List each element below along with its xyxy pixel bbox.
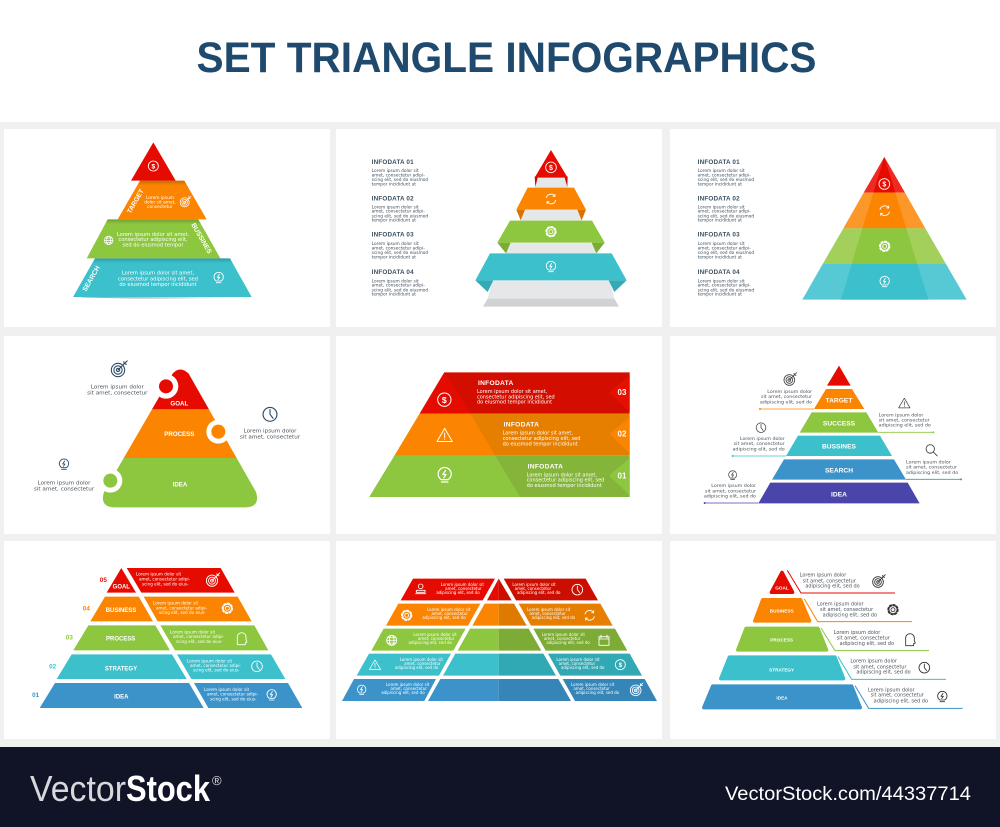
level: process xyxy=(124,409,237,458)
list: infodata: tempor incididunt ut xyxy=(698,292,742,298)
list: infodata: INFODATA 03 xyxy=(698,232,740,239)
banner: 03: consectetur adipiscing elit, sed xyxy=(477,394,555,400)
list: infodata: scing elit, sed do eiusmod xyxy=(698,213,754,219)
list: infodata: Lorem ipsum dolor sit xyxy=(698,168,745,174)
row: blue: Lorem ipsum dolor sit xyxy=(386,682,430,687)
row: 03 process: 03 xyxy=(66,634,73,641)
row: orange: adipiscing elit, sed do xyxy=(422,615,466,620)
list: infodata: scing elit, sed do eiusmod xyxy=(372,287,428,293)
row: idea xyxy=(704,686,963,708)
banner: 03: Lorem ipsum dolor sit amet, xyxy=(477,389,548,395)
row: red: Lorem ipsum dolor sit xyxy=(512,582,556,587)
icon: target xyxy=(111,361,127,377)
panel: three column pyramid xyxy=(336,541,662,739)
tier: bussines: BUSSINES xyxy=(189,222,213,256)
ring: orange xyxy=(206,420,230,444)
tier: target: sit amet, consectetur xyxy=(761,394,812,400)
ribbon: orange xyxy=(516,188,586,220)
list: infodata: scing elit, sed do eiusmod xyxy=(698,177,754,183)
row: 05 goal: Lorem ipsum dolor sit xyxy=(136,572,182,577)
layer: teal xyxy=(802,264,967,300)
row: idea: IDEA xyxy=(776,695,788,700)
list: infodata: amet, consectetur adipi- xyxy=(372,245,425,251)
row: business xyxy=(755,599,912,622)
list: infodata: Lorem ipsum dolor sit xyxy=(698,278,745,284)
row: business: sit amet, consectetur xyxy=(820,607,874,613)
list: infodata: tempor incididunt ut xyxy=(698,218,742,224)
level: idea xyxy=(102,458,258,508)
ring: red xyxy=(154,374,178,399)
row: strategy xyxy=(721,657,946,679)
row: 05 goal: amet, consectetur adipi- xyxy=(139,576,191,581)
text: goal: Lorem ipsum dolor xyxy=(91,385,144,391)
tier: target: Lorem ipsum dolor xyxy=(767,389,812,395)
row: idea: Lorem ipsum dolor xyxy=(868,687,916,693)
tier: bussines: consectetur adipiscing elit, xyxy=(118,237,188,243)
row: process: sit amet, consectetur xyxy=(837,635,891,641)
list: infodata: tempor incididunt ut xyxy=(372,218,416,224)
tier: bussines: sit amet, consectetur xyxy=(734,441,785,447)
icon: clock xyxy=(263,407,277,421)
tier: search: SEARCH xyxy=(82,265,102,293)
row: orange: adipiscing elit, sed do xyxy=(532,615,576,620)
layer: red xyxy=(864,157,905,193)
tier: search xyxy=(772,445,962,480)
row: green xyxy=(371,629,627,651)
banner: 01: Lorem ipsum dolor sit amet, xyxy=(527,472,597,478)
row: 04 business: scing elit, sed do eius- xyxy=(159,610,206,615)
tier: search: Lorem ipsum dolor xyxy=(906,460,951,466)
list: infodata: INFODATA 04 xyxy=(372,269,414,276)
row: 02 strategy xyxy=(49,654,285,679)
tier: target: TARGET xyxy=(126,188,146,215)
tier: idea: adipiscing elit, sed do xyxy=(704,494,756,500)
tier: idea: IDEA xyxy=(831,491,847,498)
banner: 02 xyxy=(395,414,630,455)
row: teal: Lorem ipsum dolor sit xyxy=(556,657,600,662)
row: red: amet, consectetur xyxy=(515,586,552,591)
tier: search: adipiscing elit, sed do xyxy=(906,470,958,476)
list: infodata: Lorem ipsum dolor sit xyxy=(372,204,419,210)
banner: 03 xyxy=(420,372,630,414)
tier: idea xyxy=(704,471,920,504)
row: blue: Lorem ipsum dolor sit xyxy=(571,682,615,687)
row: 02 strategy: STRATEGY xyxy=(105,666,137,672)
row: teal: Lorem ipsum dolor sit xyxy=(400,657,443,662)
list: infodata: Lorem ipsum dolor sit xyxy=(372,241,419,247)
tier: idea: sit amet, consectetur xyxy=(705,488,756,494)
row: orange: amet, consectetur xyxy=(529,611,566,616)
row: strategy: sit amet, consectetur xyxy=(853,664,907,670)
row: green: Lorem ipsum dolor sit xyxy=(413,632,457,637)
row: 04 business xyxy=(83,597,252,621)
list: infodata: Lorem ipsum dolor sit xyxy=(372,278,419,284)
list: infodata: INFODATA 01 xyxy=(698,159,740,166)
row: orange: amet, consectetur xyxy=(432,611,468,616)
row: strategy: STRATEGY xyxy=(769,667,795,672)
banner: 02: do eiusmod tempor incididunt xyxy=(503,441,578,447)
list: infodata: tempor incididunt ut xyxy=(372,254,416,260)
panel: six level pyramid with leader lines xyxy=(670,336,996,534)
tier: top: $ xyxy=(151,163,155,170)
list: infodata: tempor incididunt ut xyxy=(372,292,416,298)
row: red xyxy=(401,579,598,600)
list: infodata: INFODATA 03 xyxy=(372,232,414,239)
banner: 02: INFODATA xyxy=(504,422,539,429)
list: infodata: amet, consectetur adipi- xyxy=(698,209,751,215)
row: 02 strategy: amet, consectetur adipi- xyxy=(190,663,242,668)
tier: target: Lorem ipsum xyxy=(146,195,174,201)
text: process: sit amet, consectetur xyxy=(240,434,301,440)
list: infodata: amet, consectetur adipi- xyxy=(372,283,425,289)
list: infodata: amet, consectetur adipi- xyxy=(372,209,425,215)
list: infodata: scing elit, sed do eiusmod xyxy=(372,250,428,256)
list: infodata: amet, consectetur adipi- xyxy=(698,245,751,251)
footer logo: ® xyxy=(212,773,222,788)
row: blue: amet, consectetur xyxy=(573,686,610,691)
list: infodata: Lorem ipsum dolor sit xyxy=(698,241,745,247)
panel: rounded pyramid with offset lines xyxy=(670,541,996,739)
tier: bussines: sed do eiusmod tempor xyxy=(123,242,184,248)
row: goal: Lorem ipsum dolor xyxy=(800,573,847,579)
list: infodata: amet, consectetur adipi- xyxy=(698,283,751,289)
tier: bussines: adipiscing elit, sed do xyxy=(733,446,785,452)
ribbon: red xyxy=(535,150,568,187)
list: infodata: INFODATA 04 xyxy=(698,269,740,276)
row: blue xyxy=(342,679,657,701)
row: 04 business: BUSINESS xyxy=(106,608,136,614)
row: business: adipiscing elit, sed do xyxy=(823,612,877,618)
row: strategy: adipiscing elit, sed do xyxy=(856,670,911,676)
tier: search xyxy=(73,258,252,297)
list: infodata: tempor incididunt ut xyxy=(372,181,416,187)
list: infodata: scing elit, sed do eiusmod xyxy=(698,287,754,293)
icon: bulb xyxy=(59,459,69,469)
pyramid steps grey xyxy=(483,178,619,307)
row: red: amet, consectetur xyxy=(445,586,482,591)
row: 05 goal: GOAL xyxy=(113,585,130,591)
row: teal: adipiscing elit, sed do xyxy=(395,665,439,670)
row: 01 idea: IDEA xyxy=(114,694,129,700)
list: infodata: INFODATA 02 xyxy=(698,195,740,202)
tier: top xyxy=(131,142,176,181)
row: green: adipiscing elit, sed do xyxy=(546,640,590,645)
row: 05 goal: scing elit, sed do eius- xyxy=(142,581,189,586)
row: 03 process: amet, consectetur adipi- xyxy=(173,634,225,639)
tier: success: adipiscing elit, sed do xyxy=(879,423,931,429)
tier: idea: Lorem ipsum dolor xyxy=(711,483,756,489)
row: 02 strategy: 02 xyxy=(49,663,57,670)
tier: target xyxy=(118,181,207,219)
row: red: adipiscing elit, sed do xyxy=(517,590,561,595)
list: infodata xyxy=(372,159,428,298)
text: idea: Lorem ipsum dolor xyxy=(38,480,91,486)
text: process: Lorem ipsum dolor xyxy=(244,428,297,434)
ring: green xyxy=(98,469,122,493)
row: teal: $ xyxy=(619,662,623,669)
panel: split pyramid with numbers xyxy=(4,541,330,739)
page background xyxy=(0,122,1000,747)
list: infodata: Lorem ipsum dolor sit xyxy=(698,204,745,210)
tier: red xyxy=(827,366,851,386)
row: 05 goal: 05 xyxy=(100,577,107,584)
row: 03 process: PROCESS xyxy=(106,637,135,643)
banner: 02: consectetur adipiscing elit, sed xyxy=(503,436,580,442)
tier: success: sit amet, consectetur xyxy=(879,418,930,424)
row: goal: adipiscing elit, sed do xyxy=(805,584,860,590)
list: infodata xyxy=(698,159,754,298)
panel: banner pyramid xyxy=(336,336,662,534)
row: process: Lorem ipsum dolor xyxy=(834,630,881,636)
tier: success xyxy=(800,398,934,433)
layer: orange xyxy=(843,193,925,228)
tier: target: adipiscing elit, sed do xyxy=(760,399,812,405)
row: orange: Lorem ipsum dolor sit xyxy=(527,607,571,612)
row: business: Lorem ipsum dolor xyxy=(817,601,865,607)
row: red: Lorem ipsum dolor sit xyxy=(441,582,484,587)
list: infodata: INFODATA 02 xyxy=(372,195,414,202)
banner: 01 xyxy=(369,455,630,497)
tier: bussines: Lorem ipsum dolor sit amet, xyxy=(117,232,189,238)
row: process: adipiscing elit, sed do xyxy=(840,641,894,647)
row: 02 strategy: Lorem ipsum dolor sit xyxy=(187,658,233,663)
banner: 03: INFODATA xyxy=(478,380,514,387)
tier: search: sit amet, consectetur xyxy=(906,465,957,471)
ground shadow xyxy=(82,297,247,299)
list: infodata: scing elit, sed do eiusmod xyxy=(372,213,428,219)
row: goal: sit amet, consectetur xyxy=(803,578,857,584)
level: idea: IDEA xyxy=(173,481,188,488)
banner: 01: 01 xyxy=(618,471,627,480)
list: infodata: tempor incididunt ut xyxy=(698,254,742,260)
banner: 01: INFODATA xyxy=(528,463,563,470)
row: goal: GOAL xyxy=(775,586,789,591)
tier: bussines xyxy=(87,219,220,258)
tier: search: SEARCH xyxy=(825,467,853,474)
tier: search: do eiusmod tempor incididunt xyxy=(119,282,197,288)
row: green: adipiscing elit, sed do xyxy=(409,640,453,645)
footer logo: Stock xyxy=(126,768,211,809)
list: infodata: amet, consectetur adipi- xyxy=(698,173,751,179)
list: infodata: INFODATA 01 xyxy=(372,159,414,166)
row: 01 idea xyxy=(32,683,302,708)
banner: 01: do eiusmod tempor incididunt xyxy=(527,483,602,489)
banner: 03: 03 xyxy=(618,388,627,397)
level: goal xyxy=(152,370,209,410)
footer logo xyxy=(30,768,222,809)
list: infodata: scing elit, sed do eiusmod xyxy=(372,177,428,183)
row: blue: amet, consectetur xyxy=(391,686,427,691)
row: 04 business: amet, consectetur adipi- xyxy=(156,605,208,610)
panel: folded paper pyramid xyxy=(4,129,330,327)
row: blue: adipiscing elit, sed do xyxy=(381,690,425,695)
row: blue: adipiscing elit, sed do xyxy=(576,690,620,695)
footer logo: Vector xyxy=(30,768,126,809)
row: idea: adipiscing elit, sed do xyxy=(874,698,928,704)
level: goal: GOAL xyxy=(170,401,188,408)
tier: target: consectetur xyxy=(147,204,173,210)
row: 01 idea: Lorem ipsum dolor sit xyxy=(204,687,250,692)
tier: success: SUCCESS xyxy=(823,421,856,428)
row: 01 idea: amet, consectetur adipi- xyxy=(207,692,259,697)
text: idea: sit amet, consectetur xyxy=(34,487,95,493)
row: red: adipiscing elit, sed do xyxy=(436,590,480,595)
row: 01 idea: scing elit, sed do eius- xyxy=(210,696,257,701)
row: 04 business: Lorem ipsum dolor sit xyxy=(153,601,199,606)
row: goal xyxy=(771,570,895,593)
tier: target xyxy=(759,373,864,410)
tier: bussines: BUSSINES xyxy=(822,444,857,451)
tier: search: consectetur adipiscing elit, sed xyxy=(118,276,198,282)
row: 04 business: 04 xyxy=(83,606,90,613)
row: process: PROCESS xyxy=(770,638,793,643)
tier: search: Lorem ipsum dolor sit amet, xyxy=(122,271,194,277)
list: infodata: Lorem ipsum dolor sit xyxy=(372,168,419,174)
panel: translucent pyramid with list xyxy=(670,129,996,327)
row: 02 strategy: scing elit, sed do eius- xyxy=(193,668,240,673)
row: 03 process: Lorem ipsum dolor sit xyxy=(170,629,216,634)
panel: ribbon pyramid with list xyxy=(336,129,662,327)
ribbon: red: $ xyxy=(549,165,553,172)
row: green: amet, consectetur xyxy=(544,636,581,641)
tier: bussines xyxy=(732,423,892,457)
row: strategy: Lorem ipsum dolor xyxy=(850,659,898,665)
row: green: amet, consectetur xyxy=(418,636,455,641)
row: 05 goal xyxy=(100,568,235,593)
row: orange: Lorem ipsum dolor sit xyxy=(427,607,471,612)
banner: 01: consectetur adipiscing elit, sed xyxy=(527,478,604,484)
tier: target: dolor sit amet, xyxy=(144,200,176,206)
tier: target: TARGET xyxy=(826,398,852,405)
level: process: PROCESS xyxy=(164,431,194,438)
row: green: Lorem ipsum dolor sit xyxy=(542,632,585,637)
row: teal: adipiscing elit, sed do xyxy=(561,665,605,670)
banner: 02: Lorem ipsum dolor sit amet, xyxy=(503,431,573,437)
banner: 03: do eiusmod tempor incididunt xyxy=(477,400,552,406)
ribbon: green xyxy=(497,221,605,253)
row: teal xyxy=(357,654,642,676)
banner: 02: 02 xyxy=(618,430,627,439)
row: process xyxy=(738,628,929,651)
footer url: VectorStock.com/44337714 xyxy=(725,784,971,805)
ribbon: teal xyxy=(475,253,627,292)
row: idea: sit amet, consectetur xyxy=(871,693,925,699)
list: infodata: amet, consectetur adipi- xyxy=(372,173,425,179)
layer: green xyxy=(823,228,946,264)
title: SET TRIANGLE INFOGRAPHICS xyxy=(196,34,816,82)
list: infodata: tempor incididunt ut xyxy=(698,181,742,187)
row: 01 idea: 01 xyxy=(32,692,40,699)
row: 03 process xyxy=(66,625,268,650)
panel: rounded pyramid with rings xyxy=(4,336,330,534)
row: orange xyxy=(386,604,613,626)
text: goal: sit amet, consectetur xyxy=(87,391,148,397)
list: infodata: scing elit, sed do eiusmod xyxy=(698,250,754,256)
tier: success: Lorem ipsum dolor xyxy=(879,412,923,418)
footer bar xyxy=(0,747,1000,827)
layer: red: $ xyxy=(882,182,886,189)
banner: 03: $ xyxy=(442,395,447,405)
row: 03 process: scing elit, sed do eius- xyxy=(176,639,223,644)
row: teal: amet, consectetur xyxy=(559,661,596,666)
row: business: BUSINESS xyxy=(770,609,794,614)
tier: bussines: Lorem ipsum dolor xyxy=(740,436,785,442)
row: teal: amet, consectetur xyxy=(404,661,441,666)
